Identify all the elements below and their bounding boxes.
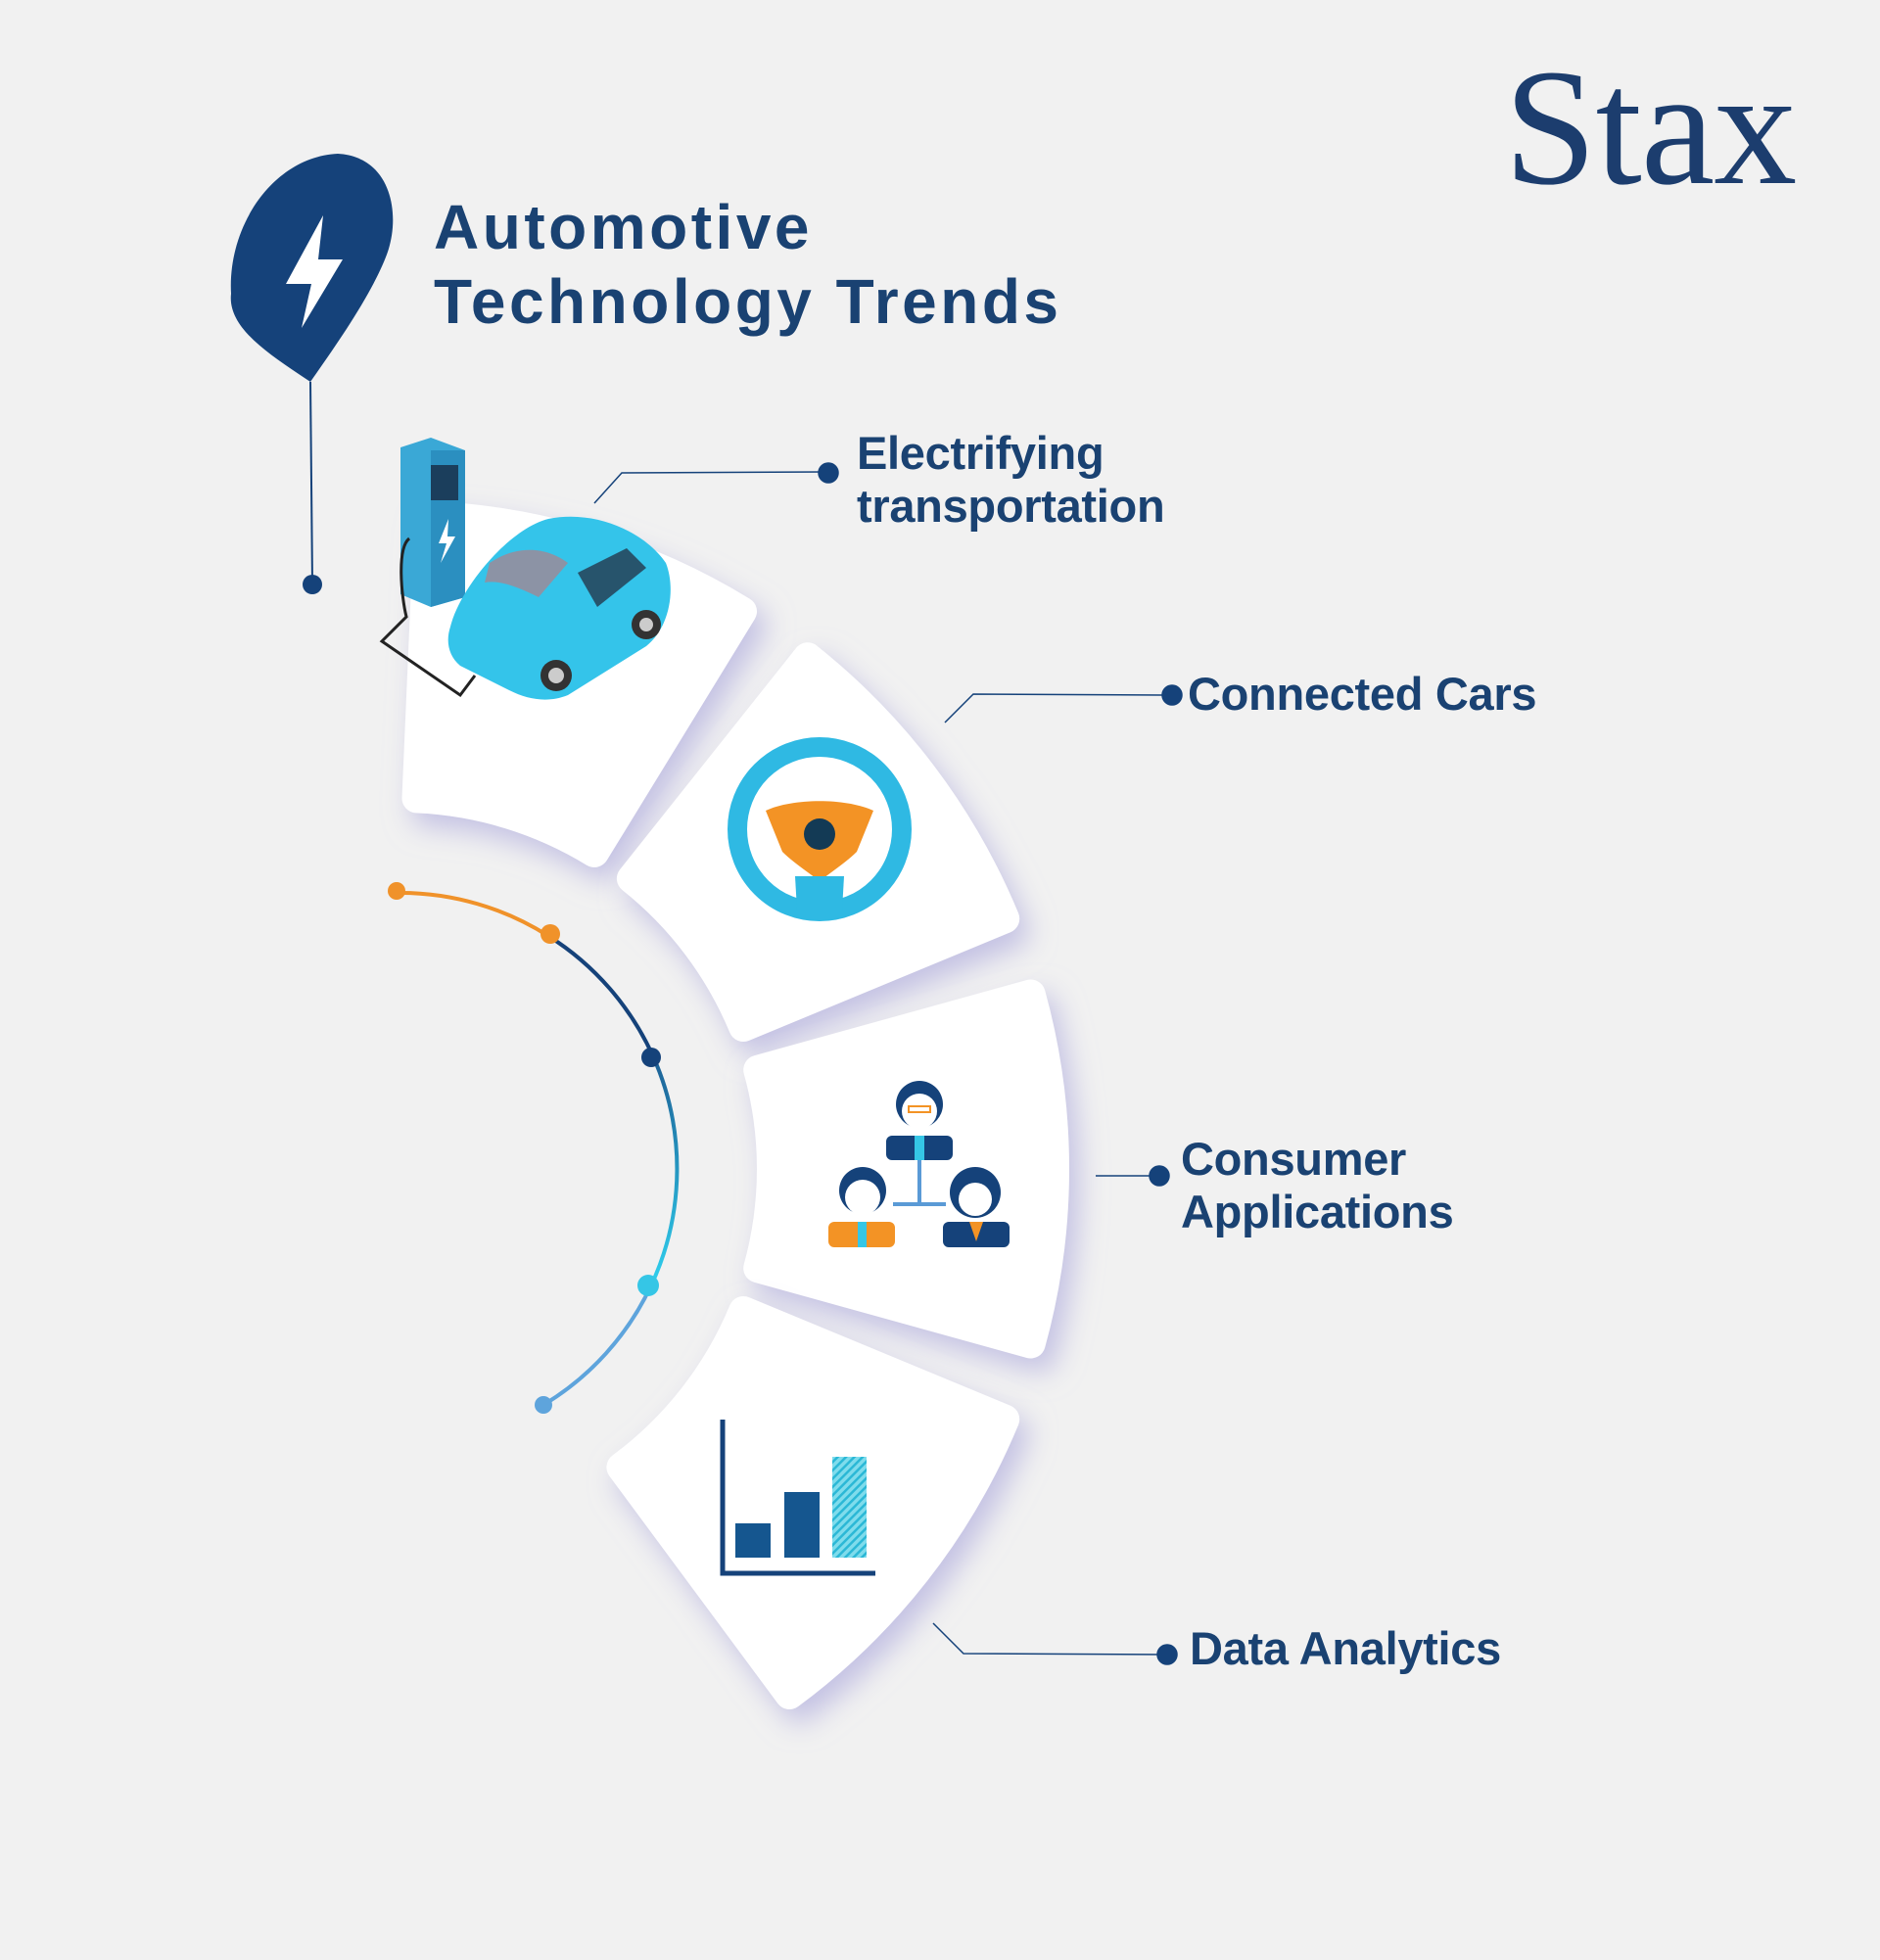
connector: electrifying bbox=[594, 463, 838, 503]
title: Technology Trends bbox=[434, 266, 1061, 337]
connector: connected cars bbox=[945, 685, 1182, 723]
title: Automotive bbox=[434, 192, 813, 262]
panel: electrifying bbox=[417, 516, 742, 853]
label: connected cars: Connected Cars bbox=[1188, 668, 1536, 720]
connector: consumer bbox=[1096, 1166, 1169, 1186]
pin icon bbox=[231, 154, 393, 594]
icon: charger and car bbox=[382, 438, 671, 700]
label: electrifying bbox=[857, 427, 1164, 532]
title bbox=[434, 192, 1061, 337]
label: data analytics: Data Analytics bbox=[1190, 1622, 1501, 1674]
label: consumer bbox=[1181, 1133, 1453, 1237]
label: electrifying: Electrifying bbox=[857, 427, 1104, 479]
panel: connected cars bbox=[632, 657, 1005, 1027]
label: electrifying: transportation bbox=[857, 480, 1164, 532]
icon: steering wheel bbox=[737, 747, 902, 911]
icon: bar chart bbox=[723, 1420, 875, 1573]
logo: Stax bbox=[1504, 35, 1796, 219]
panel: data analytics bbox=[621, 1311, 1005, 1695]
label: consumer: Consumer bbox=[1181, 1133, 1406, 1185]
panel: consumer applications bbox=[758, 995, 1055, 1343]
connector: data analytics bbox=[933, 1623, 1177, 1664]
icon: people bbox=[828, 1081, 1010, 1247]
arc with dots bbox=[388, 882, 677, 1414]
label: consumer: Applications bbox=[1181, 1186, 1453, 1237]
